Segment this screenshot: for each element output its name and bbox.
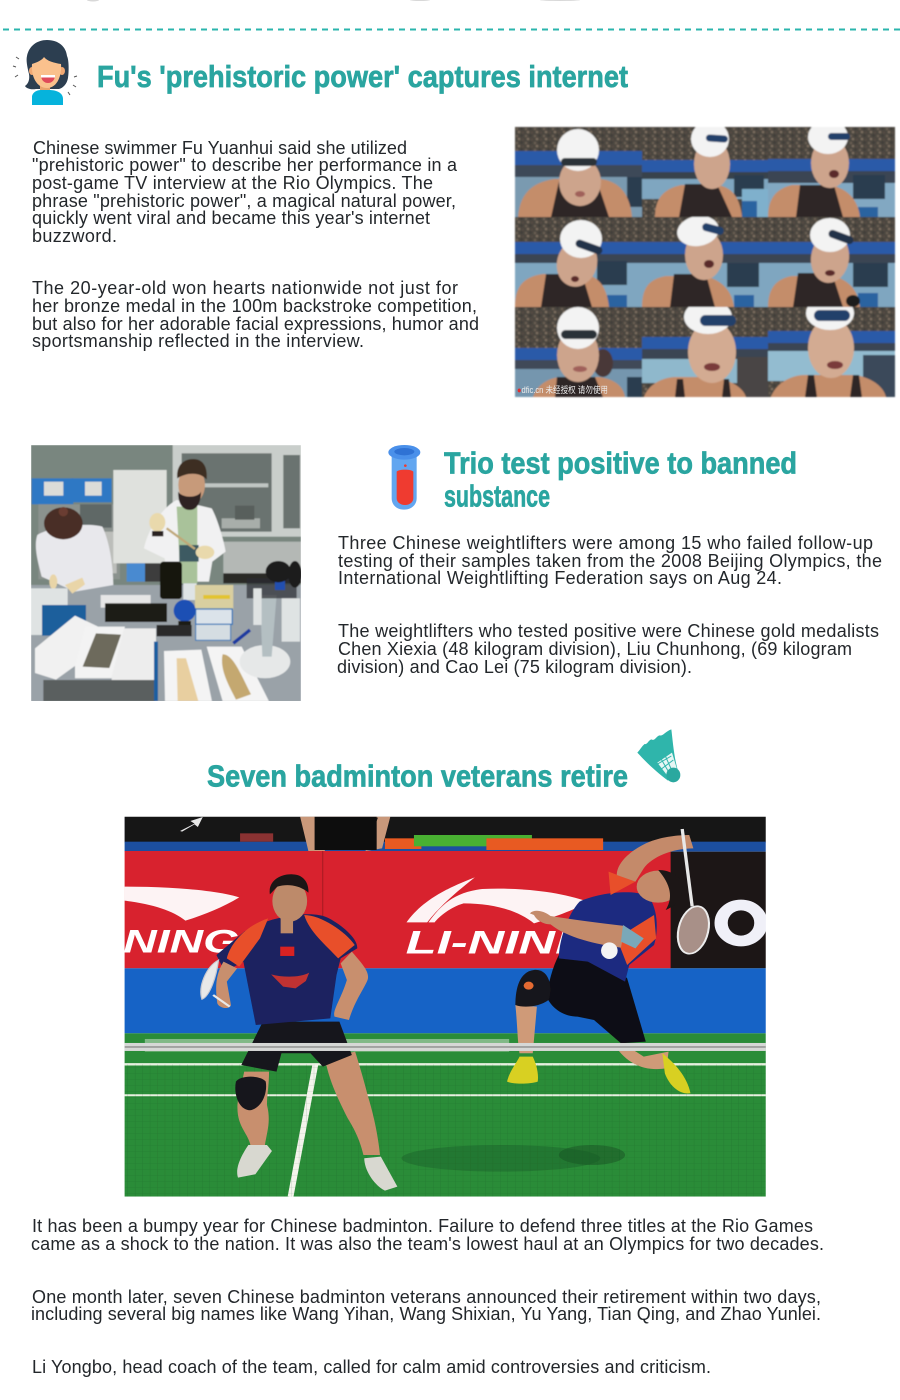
photo: badminton doubles players — [123, 817, 766, 1197]
frame 5 — [642, 213, 769, 307]
net tape — [125, 1043, 766, 1051]
text block: Fu Yuanhui story: The 20-year-old won hearts nationwide not just for — [32, 278, 458, 298]
blue cabinets — [32, 478, 120, 579]
text block: badminton retirement — [31, 1216, 824, 1377]
left player — [201, 874, 397, 1191]
frame 3 — [768, 120, 895, 217]
text block: Fu Yuanhui story: quickly went viral and became this year's internet — [32, 208, 430, 228]
image watermark: ●dfic.cn 未经授权 请勿使用 — [517, 384, 608, 395]
text block: weightlifters: The weightlifters who tested positive were Chinese gold medalists — [338, 621, 879, 641]
text block: badminton retirement: came as a shock to the nation. It was also the team's lowest haul at an Olympics for two decades. — [31, 1234, 824, 1254]
text block: Fu Yuanhui story: her bronze medal in the 100m backstroke competition, — [32, 296, 477, 316]
text block: weightlifters: testing of their samples taken from the 2008 Beijing Olympics, the — [338, 551, 882, 571]
text block: weightlifters: International Weightlifting Federation says on Aug 24. — [338, 568, 782, 588]
frame 8 — [642, 300, 769, 397]
photo: nine frames of Fu Yuanhui — [515, 120, 895, 397]
icon: smiling woman — [13, 40, 77, 105]
blue surround and green court — [125, 968, 766, 1197]
heading: trio test positive: substance — [444, 478, 550, 514]
text block: Fu Yuanhui story: "prehistoric power" to describe her performance in a — [32, 155, 458, 175]
woman in lab coat — [36, 507, 113, 594]
frame 6 — [768, 217, 895, 307]
text block: Fu Yuanhui story: post-game TV interview at the Rio Olympics. The — [32, 173, 433, 193]
frame 4 — [515, 217, 642, 307]
text block: weightlifters: Three Chinese weightlifters were among 15 who failed follow-up — [338, 533, 873, 553]
frame 1 — [515, 127, 642, 217]
text block: badminton retirement: It has been a bumpy year for Chinese badminton. Failure to defend three titles at the Rio Games — [32, 1216, 813, 1236]
text block: badminton retirement: Li Yongbo, head coach of the team, called for calm amid controversies and criticism. — [32, 1357, 711, 1377]
fume hood — [173, 445, 301, 583]
text block: Fu Yuanhui story — [32, 138, 479, 351]
text block: weightlifters: division) and Cao Lei (75 kilogram division). — [337, 657, 692, 677]
photo: lab technicians — [31, 445, 302, 702]
frame 7 — [515, 307, 642, 397]
heading: badminton veterans: Seven badminton veterans retire — [207, 758, 628, 794]
frame 2 — [642, 121, 769, 217]
stands — [125, 817, 766, 852]
top edge remnant — [87, 0, 580, 2]
text block: Fu Yuanhui story: but also for her adorable facial expressions, humor and — [32, 314, 479, 334]
man in lab coat — [144, 459, 226, 583]
text block: weightlifters — [337, 533, 882, 677]
text block: badminton retirement: One month later, seven Chinese badminton veterans announced their retirement within two days, — [32, 1287, 821, 1307]
heading: trio test positive: Trio test positive to banned — [444, 446, 797, 480]
red sponsor board: NING — [123, 923, 239, 959]
text block: Fu Yuanhui story: buzzword. — [32, 226, 117, 246]
bench equipment — [31, 561, 302, 701]
text block: Fu Yuanhui story: sportsmanship reflected in the interview. — [32, 331, 364, 351]
text block: badminton retirement: including several big names like Wang Yihan, Wang Shixian, Yu Yang, Tian Qing, and Zhao Yunlei. — [31, 1304, 821, 1324]
bench — [31, 585, 301, 702]
icon: test tube — [388, 445, 420, 510]
text block: Fu Yuanhui story: phrase "prehistoric power", a magical natural power, — [32, 191, 456, 211]
heading: Fu's prehistoric power: Fu's 'prehistoric power' captures internet — [97, 59, 628, 94]
right player — [507, 829, 713, 1094]
text block: Fu Yuanhui story: Chinese swimmer Fu Yuanhui said she utilized — [33, 138, 407, 158]
white fridge — [113, 470, 167, 582]
red sponsor board — [123, 851, 766, 968]
icon: shuttlecock — [637, 729, 680, 782]
frame 9 — [768, 296, 895, 397]
red sponsor board: LI-NINI — [406, 924, 571, 960]
heading: trio test positive — [444, 446, 797, 514]
text block: weightlifters: Chen Xiexia (48 kilogram division), Liu Chunhong, (69 kilogram — [338, 639, 852, 659]
